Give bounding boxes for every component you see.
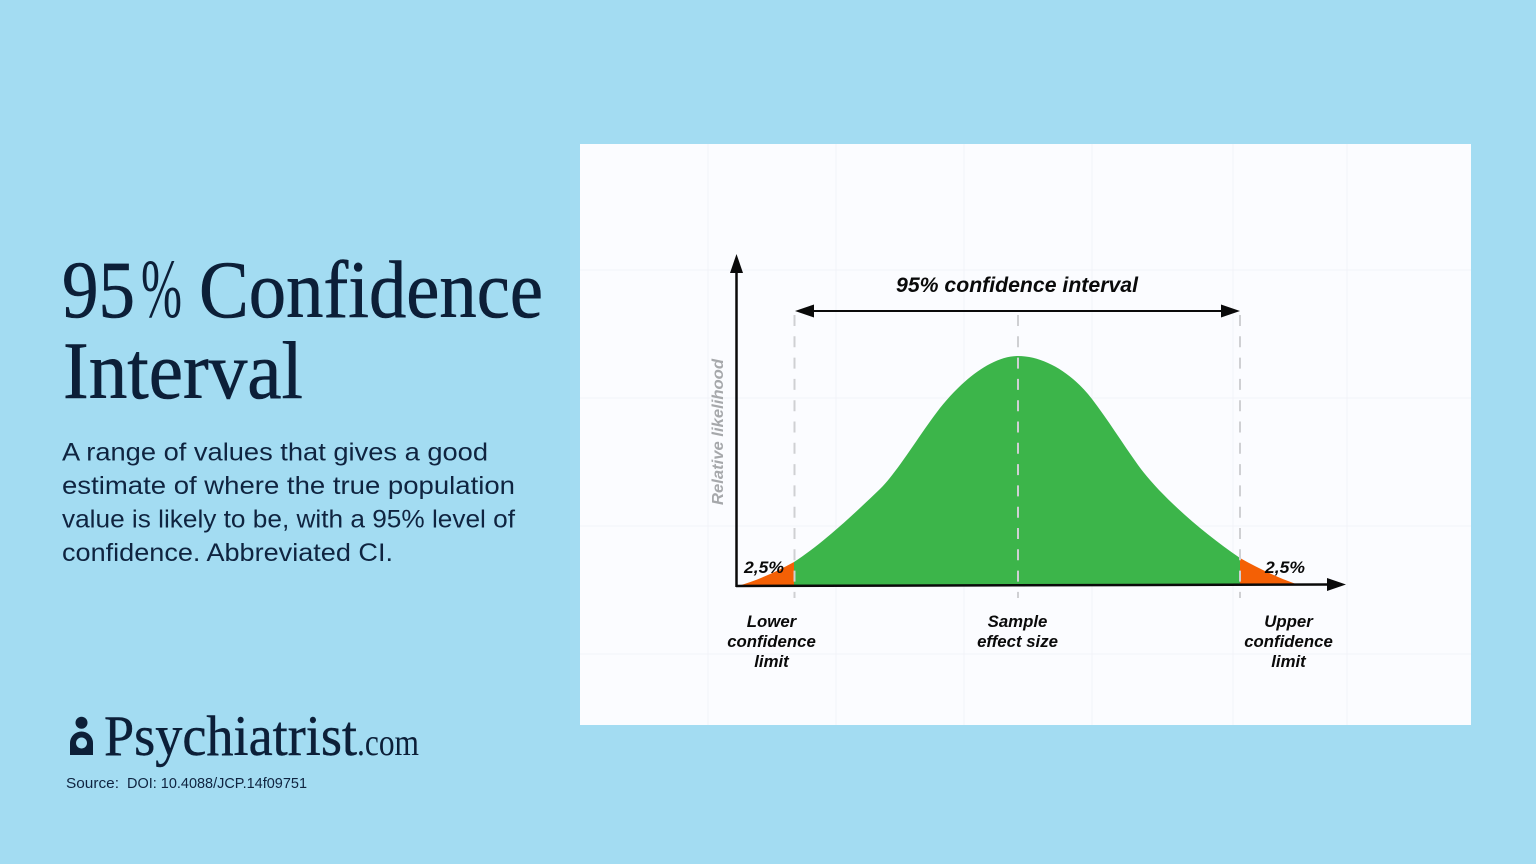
confidence interval arrow	[795, 304, 1240, 318]
wordmark suffix: .com	[357, 722, 419, 764]
title: Confidence	[199, 244, 543, 335]
label: lower confidence limit: Lower	[747, 612, 798, 631]
label: lower confidence limit: limit	[754, 652, 790, 671]
source line: Source:	[66, 775, 119, 792]
label: upper confidence limit: Upper	[1264, 612, 1314, 631]
description text: A range of values that gives a good	[62, 438, 488, 466]
description text: confidence. Abbreviated CI.	[62, 539, 393, 567]
description text	[62, 438, 515, 567]
label: sample effect size: Sample	[988, 612, 1047, 631]
description text: value is likely to be, with a 95% level of	[62, 506, 515, 534]
bell curve: central 95% area	[794, 356, 1240, 585]
label: lower confidence limit	[727, 612, 816, 671]
title: 95	[62, 244, 135, 335]
source line: DOI: 10.4088/JCP.14f09751	[127, 775, 307, 792]
y axis arrow	[730, 254, 743, 587]
y axis label: Relative likelihood	[710, 358, 727, 505]
dashed limit lines	[794, 315, 1240, 598]
label: lower confidence limit: confidence	[727, 632, 816, 651]
upper percent label: 2,5%	[1264, 558, 1305, 577]
title: %	[141, 243, 182, 336]
panel: chart	[580, 144, 1471, 725]
x axis arrow	[736, 578, 1346, 591]
lower tail: 2.5% area	[738, 562, 794, 586]
wordmark: Psychiatrist	[104, 705, 357, 768]
logo: Psychiatrist.com	[70, 705, 419, 768]
description text: estimate of where the true population	[62, 472, 515, 500]
title	[62, 243, 543, 416]
label: upper confidence limit: confidence	[1244, 632, 1333, 651]
lower percent label: 2,5%	[743, 558, 784, 577]
label: sample effect size: effect size	[977, 632, 1058, 651]
upper tail: 2.5% area	[1240, 558, 1296, 584]
label: upper confidence limit	[1244, 612, 1333, 671]
title: Interval	[63, 325, 303, 416]
label: upper confidence limit: limit	[1271, 652, 1307, 671]
label: sample effect size	[977, 612, 1058, 651]
icon: person	[70, 717, 93, 755]
interval label: 95% confidence interval	[896, 274, 1139, 297]
